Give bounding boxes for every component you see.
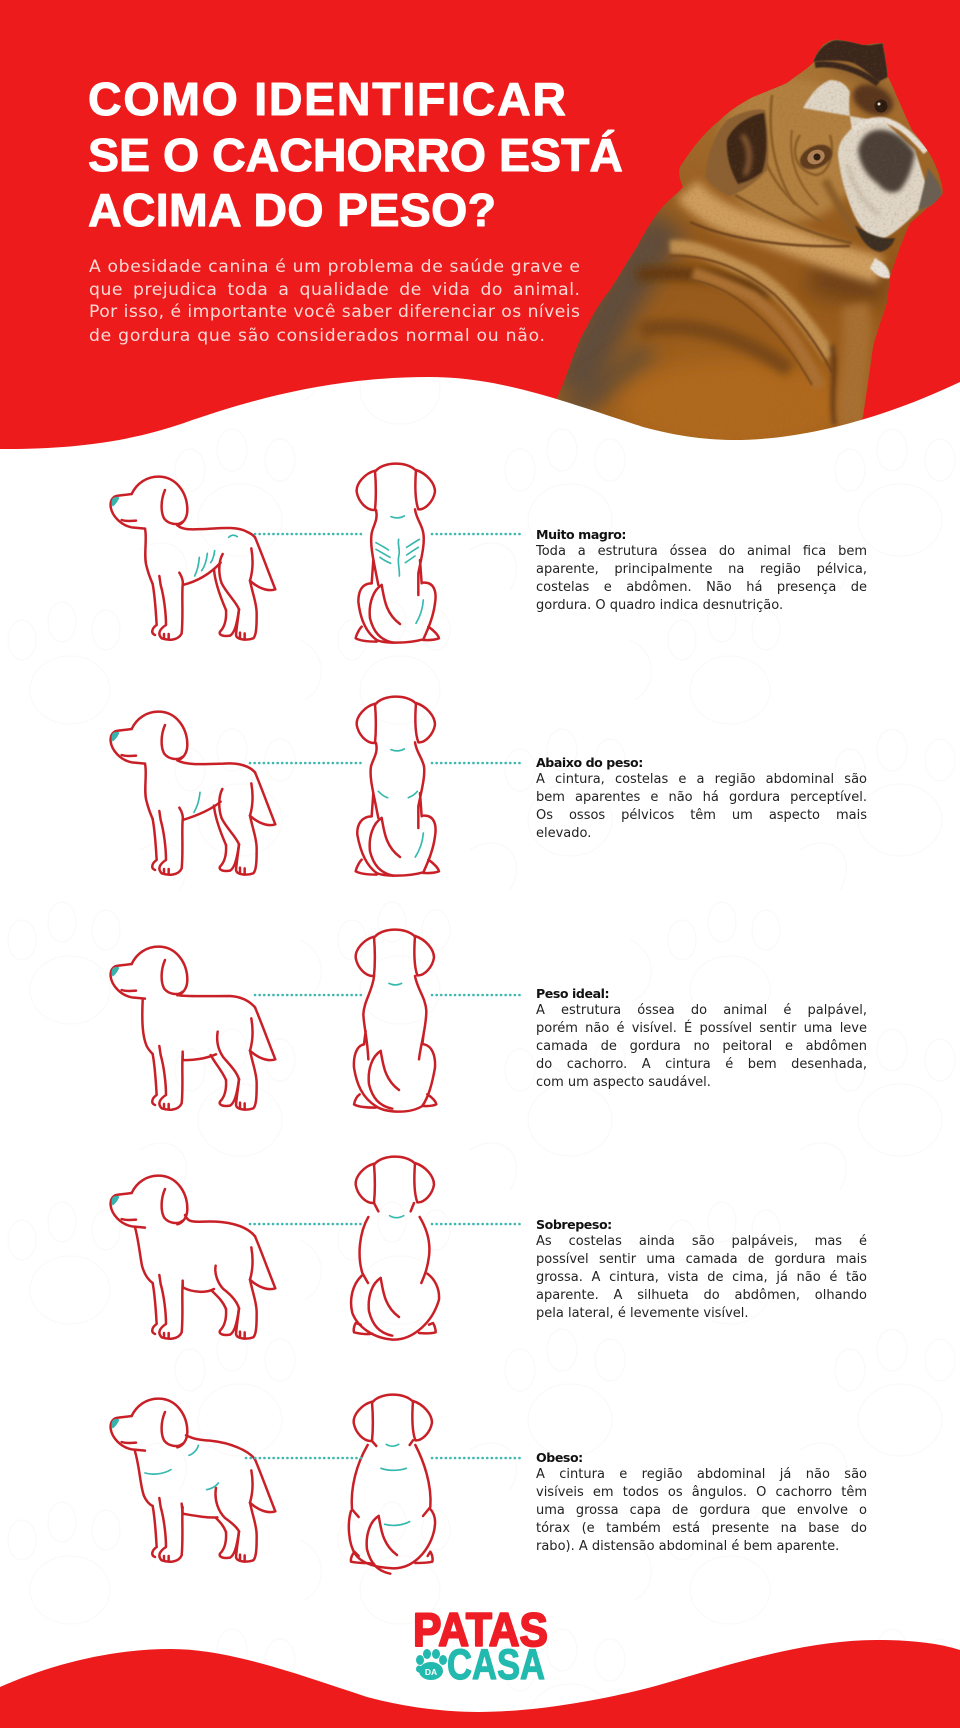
text block: Abaixo do peso: Os ossos pélvicos têm um aspecto mais (536, 808, 867, 823)
jowl shadow (918, 168, 942, 210)
stage 4 rear view: overweight dog (351, 1157, 439, 1340)
text block: Peso ideal (536, 986, 867, 1090)
stage 5 rear view: obese dog (349, 1395, 435, 1574)
text block: Obeso: tórax (e também está presente na base do (536, 1521, 867, 1536)
text block: Peso ideal: camada de gordura no peitoral e abdômen (536, 1039, 867, 1054)
text block: Muito magro: Muito magro: (536, 526, 626, 542)
stage 4 side view: overweight dog (111, 1176, 275, 1339)
connector: dotted line stage 3 (255, 994, 523, 996)
ear: left side (705, 109, 768, 196)
dark muzzle (858, 130, 915, 192)
ear: top (813, 40, 888, 82)
text block: Sobrepeso: aparente. A silhueta do abdômen, olhando (536, 1288, 867, 1303)
text block: Sobrepeso (536, 1216, 867, 1321)
stage 3 side view: ideal weight dog (111, 947, 275, 1110)
stage 3 rear view: ideal weight dog (354, 930, 436, 1112)
text block: Abaixo do peso: A cintura, costelas e a região abdominal são (536, 772, 867, 787)
stage 2 side view: underweight dog (111, 712, 275, 875)
title (88, 73, 623, 236)
text block: Muito magro (536, 526, 867, 613)
text block: Muito magro: Toda a estrutura óssea do animal fica bem (536, 544, 867, 559)
head fur (718, 62, 895, 243)
text block: Sobrepeso: Sobrepeso: (536, 1216, 612, 1232)
text block: Sobrepeso: pela lateral, é levemente visível. (536, 1306, 749, 1321)
stage 5 side view: obese dog (111, 1399, 275, 1562)
icon: paw: DA (425, 1667, 437, 1677)
red header background (0, 0, 960, 460)
text block: Obeso: Obeso: (536, 1450, 583, 1464)
shading on the dog's body (560, 190, 885, 450)
connector: dotted line stage 4 (250, 1223, 523, 1225)
logo: Patas da Casa: PATAS (413, 1603, 548, 1656)
text block: Peso ideal: Peso ideal: (536, 986, 609, 1000)
connector: dotted line stage 1 (255, 533, 523, 535)
text block: Obeso (536, 1450, 867, 1554)
text block: Sobrepeso: As costelas ainda são palpáveis, mas é (536, 1234, 867, 1249)
text block: Peso ideal: do cachorro. A cintura é bem desenhada, (536, 1057, 867, 1072)
photo: bulldog looking back (557, 40, 943, 440)
text block: Muito magro: gordura. O quadro indica desnutrição. (536, 598, 783, 613)
white area below the top wave (0, 377, 960, 1728)
intro paragraph: que prejudica toda a qualidade de vida do animal. (89, 280, 580, 300)
dark brow patch (850, 82, 896, 117)
eyes (799, 144, 833, 170)
connector: dotted line stage 5 (246, 1457, 523, 1459)
text block: Abaixo do peso: bem aparentes e não há gordura perceptível. (536, 790, 867, 805)
connector: dotted line stage 2 (250, 762, 523, 764)
text block: Muito magro: costelas e abdômen. Não há presença de (536, 580, 867, 595)
text block: Obeso: A cintura e região abdominal já não são (536, 1467, 867, 1482)
text block: Sobrepeso: possível sentir uma camada de gordura mais (536, 1252, 867, 1267)
intro paragraph: A obesidade canina é um problema de saúde grave e (89, 257, 580, 277)
white blaze and jowl (803, 80, 930, 240)
text block: Abaixo do peso (536, 754, 867, 841)
logo: Patas da Casa (413, 1603, 548, 1689)
stage 1 side view: very thin dog (111, 477, 275, 640)
stage 2 rear view: underweight dog (356, 697, 439, 876)
text block: Obeso: visíveis em todos os ângulos. O cachorro têm (536, 1485, 867, 1500)
text block: Abaixo do peso: Abaixo do peso: (536, 754, 643, 770)
title: SE O CACHORRO ESTÁ (88, 129, 623, 181)
title: COMO IDENTIFICAR (88, 73, 566, 125)
title: ACIMA DO PESO? (88, 184, 496, 236)
text block: Peso ideal: porém não é visível. É possível sentir uma leve (536, 1021, 867, 1036)
text block: Muito magro: aparente, principalmente na região pélvica, (536, 562, 867, 577)
bottom red wave (0, 1640, 960, 1728)
text block: Peso ideal: com um aspecto saudável. (536, 1075, 711, 1090)
text block: Abaixo do peso: elevado. (536, 826, 591, 841)
text block: Peso ideal: A estrutura óssea do animal é palpável, (536, 1003, 867, 1018)
intro paragraph (89, 257, 580, 346)
intro paragraph: de gordura que são considerados normal ou não. (89, 326, 545, 346)
logo: Patas da Casa: CASA (447, 1641, 545, 1689)
stage 1 rear view: very thin dog (356, 464, 439, 643)
text block: Obeso: rabo). A distensão abdominal é bem aparente. (536, 1539, 839, 1554)
text block: Sobrepeso: grossa. A cintura, vista de cima, já não é tão (536, 1270, 867, 1285)
text block: Obeso: uma grossa capa de gordura que envolve o (536, 1503, 867, 1518)
intro paragraph: Por isso, é importante você saber diferenciar os níveis (89, 302, 580, 322)
